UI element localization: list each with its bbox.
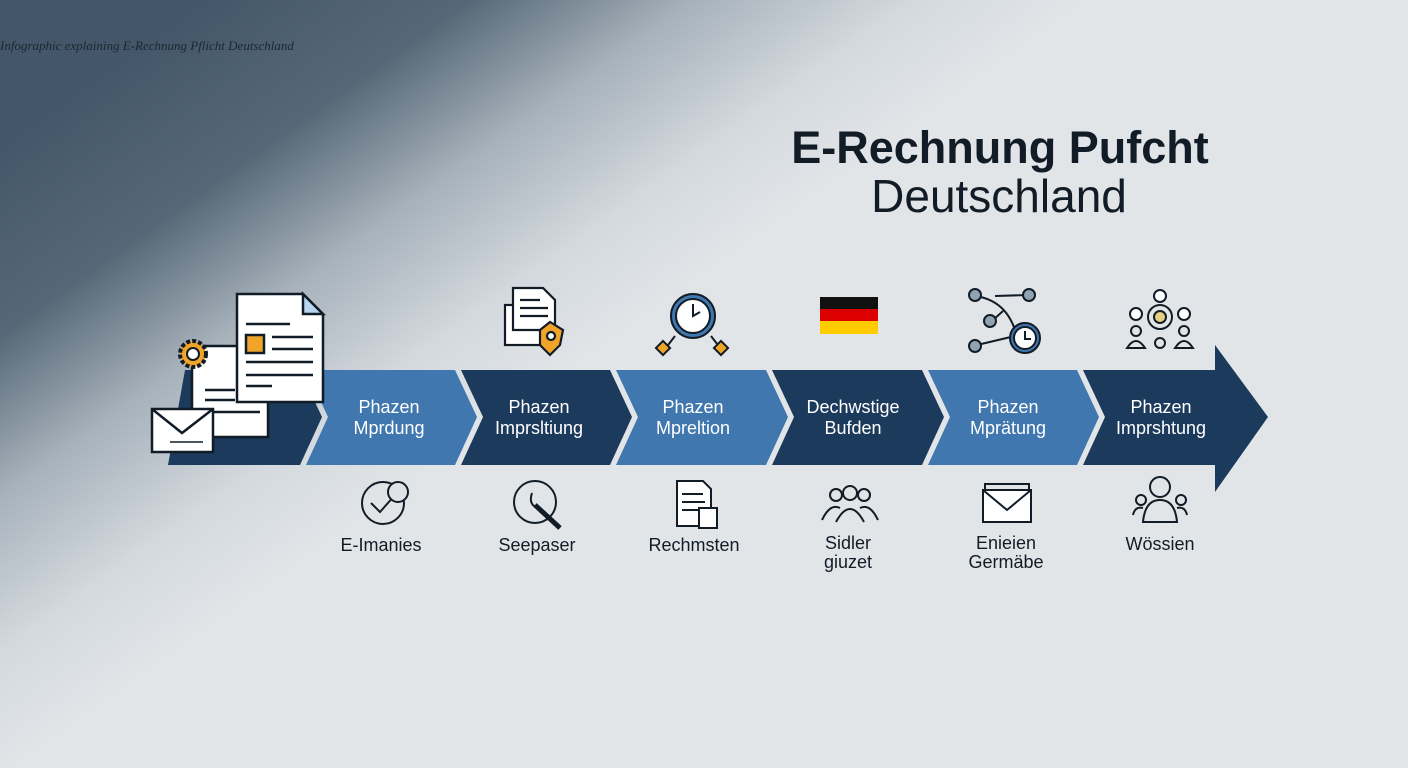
step labels: Phazen [662, 397, 724, 417]
step labels: Mprdung [353, 418, 425, 438]
bottom labels: Rechmsten [648, 535, 740, 555]
bottom labels: Seepaser [498, 535, 576, 555]
step labels: Phazen [977, 397, 1039, 417]
icon: group [822, 486, 878, 522]
bottom labels: Wössien [1125, 534, 1195, 554]
bottom icons [362, 477, 1187, 528]
caption: Infographic explaining E-Rechnung Pflicht Deutschland [0, 38, 294, 53]
step labels [353, 397, 1206, 438]
step labels: Phazen [508, 397, 570, 417]
icon: document shield [505, 288, 563, 355]
icon: document lock [677, 481, 717, 528]
bottom labels [340, 533, 1195, 572]
step labels: Phazen [358, 397, 420, 417]
step labels: Mpreltion [656, 418, 730, 438]
icon: people circle [1127, 290, 1193, 348]
icon: documents cluster [152, 294, 323, 452]
arrow band [168, 345, 1268, 492]
icon: clock [656, 294, 728, 355]
title [791, 122, 1209, 222]
title: E-Rechnung Pufcht [791, 122, 1209, 173]
step labels: Phazen [1130, 397, 1192, 417]
icon: network clock [969, 289, 1040, 353]
title: Deutschland [871, 170, 1127, 222]
step labels: Dechwstige [806, 397, 900, 417]
step labels: Mprätung [970, 418, 1046, 438]
icon: person group [1133, 477, 1187, 522]
icon: wrench search [514, 481, 560, 528]
bottom labels: Enieien [976, 533, 1036, 553]
icon: envelope [983, 484, 1031, 522]
step labels: Imprshtung [1116, 418, 1206, 438]
bottom labels: giuzet [824, 552, 872, 572]
icon: check clock [362, 482, 408, 524]
icon: german flag [820, 297, 878, 334]
bottom labels: Sidler [825, 533, 871, 553]
step labels: Bufden [824, 418, 882, 438]
bottom labels: E-Imanies [340, 535, 422, 555]
bottom labels: Germäbe [968, 552, 1044, 572]
step labels: Imprsltiung [495, 418, 583, 438]
